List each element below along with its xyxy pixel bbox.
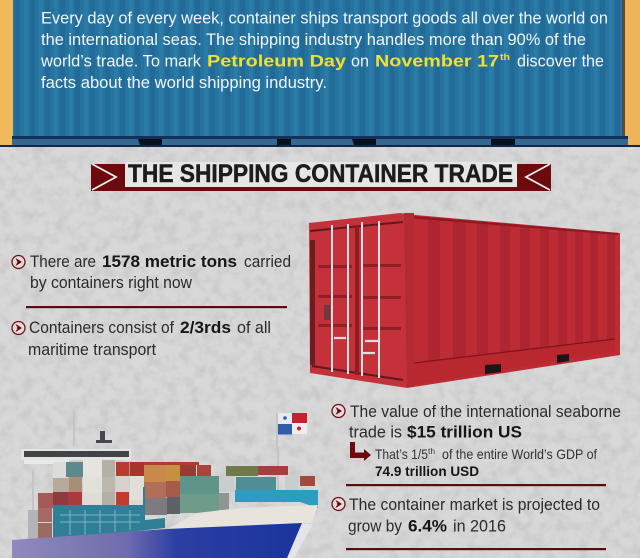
fact: maritime share: Containers consist of [29,319,174,337]
intro paragraph: Petroleum Day [207,52,347,70]
bullet icon [332,498,345,510]
door horizontal recesses [318,264,401,330]
flag: Panama [278,413,307,434]
intro paragraph: discover the [517,52,604,70]
fact: market growth: The container market is projected to [349,496,600,514]
fact: metric tons: 1578 metric tons [102,253,237,271]
bullet icon [332,404,345,418]
heading text: THE SHIPPING CONTAINER TRADE [128,160,513,188]
divider [346,484,606,486]
container base rail [12,136,628,146]
front door face [309,213,414,388]
bridge deck [21,449,131,460]
intro paragraph: on [351,52,369,70]
door gap [355,225,359,375]
arrow: sub-point [350,442,371,461]
banner ribbon [91,164,551,191]
fact: metric tons: There are [30,253,96,271]
intro paragraph: November 17 [375,52,499,70]
intro paragraph: facts about the world shipping industry. [41,74,327,92]
bullet icon [12,256,25,268]
divider [26,306,287,308]
bottom rail [414,339,615,385]
fact: trade value: $15 trillion US [407,424,522,442]
left superstructure [28,510,38,546]
fact: metric tons: carried [244,253,291,271]
banner chevrons [92,164,550,190]
hull [12,523,312,558]
fact: market growth: in 2016 [453,518,506,536]
rail slots [138,139,515,145]
blue railing frame [53,487,165,540]
panel: blue shipping container intro [0,0,640,147]
door handles [334,338,378,353]
intro paragraph: Every day of every week, container ships transport goods all over the world on [41,10,608,28]
divider [346,548,606,550]
corrugated blue wall [13,0,622,137]
masts [33,410,278,540]
white forecastle [166,505,318,530]
intro paragraph: th [500,52,510,62]
fact: maritime share: of all [237,319,271,337]
intro paragraph: the international seas. The shipping industry handles more than 90% of the [41,31,586,49]
fact: market growth: grow by [348,518,403,536]
right orange container edge [622,0,640,146]
foredeck blue housing [235,490,318,508]
intro paragraph: world’s trade. To mark [40,52,202,70]
GDP note: of the entire World’s GDP of [442,446,597,462]
background: concrete texture [0,146,640,558]
intro paragraph [40,10,608,92]
GDP note [375,446,597,479]
door locking bars [332,221,379,378]
GDP note: That’s 1/5 [375,446,428,462]
GDP note: th [428,447,435,456]
fact: metric tons: by containers right now [30,274,192,292]
door top and bottom bars [310,221,403,381]
bow edge [287,523,313,558]
fact: maritime share: maritime transport [28,341,156,359]
fact: metric tons [12,253,291,292]
heading banner [91,160,551,191]
fork pockets [485,354,569,374]
side corrugation [428,219,615,362]
illustration: red shipping container [309,213,620,388]
fact: market growth: 6.4% [408,518,447,536]
bullet icon [12,322,25,334]
container side wall [404,214,620,388]
container stacks [38,460,315,538]
GDP note: 74.9 trillion USD [375,463,479,479]
radar [96,431,112,443]
fact: maritime share [12,319,271,359]
fact: trade value: The value of the international seaborne [350,403,621,421]
fact: trade value: trade is [349,424,402,442]
left yellow container edge [0,0,13,146]
fact: maritime share: 2/3rds [180,319,231,337]
side top shadow [414,216,618,235]
fact: trade value [332,403,621,479]
illustration: container ship [12,410,318,558]
fact: market growth [332,496,600,536]
